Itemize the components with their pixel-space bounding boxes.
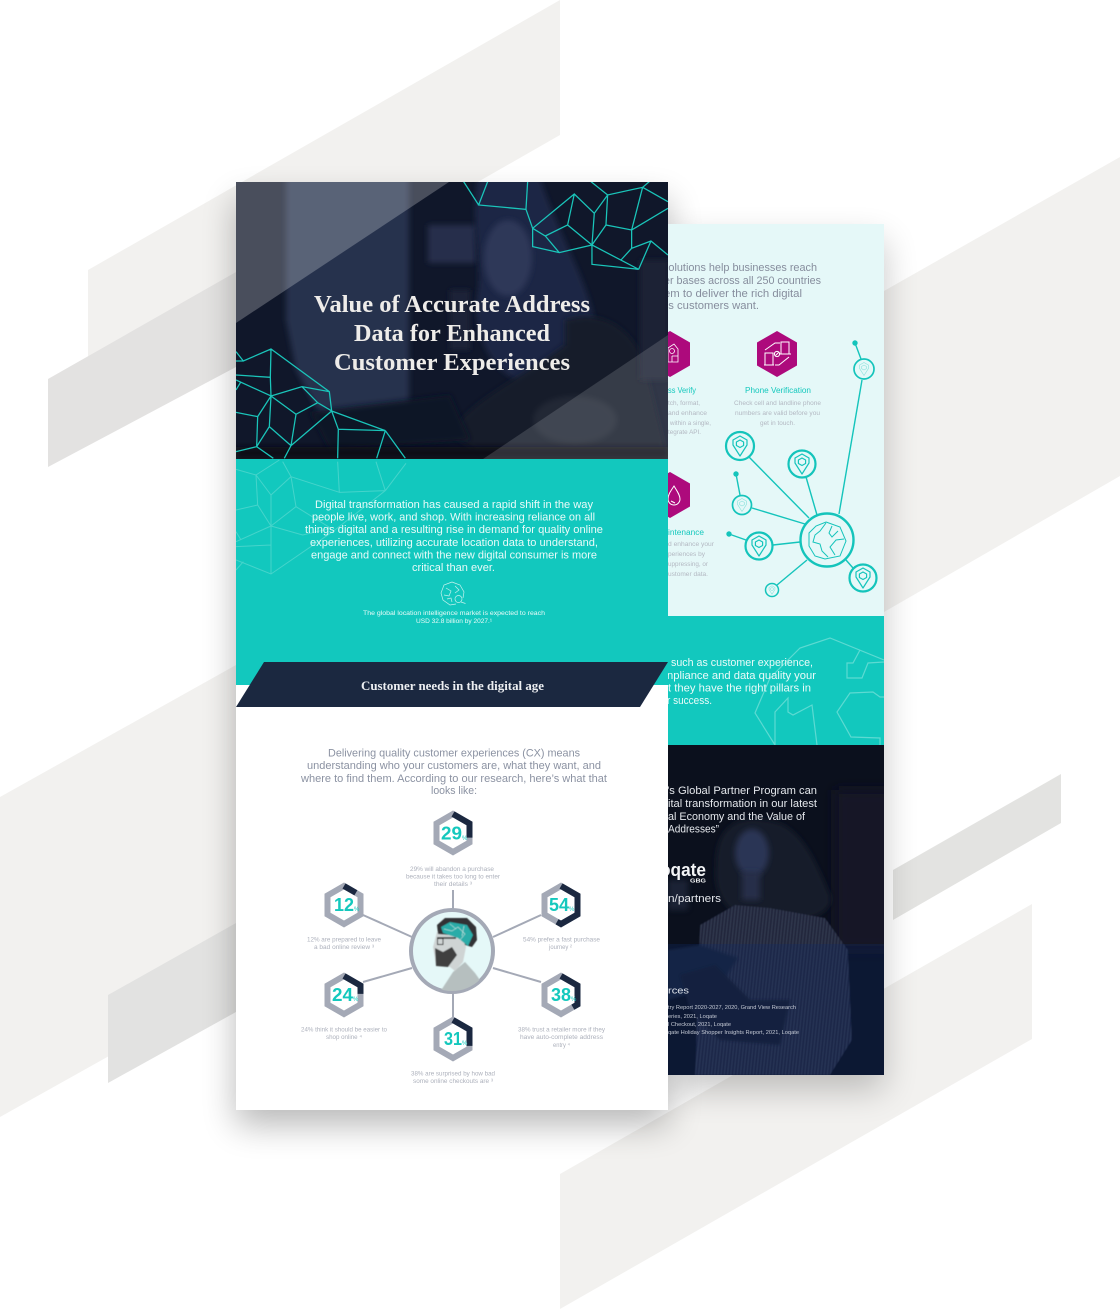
phone verification label: Check cell and landline phone	[734, 400, 822, 407]
stat: 24 percent	[301, 976, 387, 1041]
faint globe outline	[755, 638, 884, 745]
caption: 38% trust a retailer more if they	[518, 1026, 606, 1034]
phone verification label: get in touch.	[760, 420, 795, 427]
stat: 54 percent	[523, 886, 601, 951]
address verify label	[668, 386, 711, 436]
partners url: n/partners	[668, 893, 722, 905]
stat: 38 percent: %	[571, 997, 577, 1003]
panel: right dark partner section	[660, 745, 895, 1075]
caption	[301, 1026, 387, 1041]
solutions text: em to deliver the rich digital	[664, 288, 802, 300]
solutions text: er bases across all 250 countries	[664, 275, 821, 287]
caption: because it takes too long to enter	[406, 874, 500, 880]
maintenance label: ustomer data.	[668, 571, 708, 578]
maintenance label: uppressing, or	[668, 561, 708, 568]
market stat: USD 32.8 billion by 2027.¹	[416, 618, 492, 625]
banner: customer needs	[236, 662, 668, 707]
phone verification label: numbers are valid before you	[735, 410, 821, 417]
address verify label: and enhance	[668, 410, 708, 417]
phone verification label: Phone Verification	[745, 386, 811, 395]
caption: a bad online review ³	[314, 944, 374, 951]
panel: teal intro	[236, 459, 668, 685]
stat: 24 percent: %	[353, 997, 359, 1003]
partner program text: al Economy and the Value of	[668, 811, 806, 823]
stat: 12 percent: %	[354, 907, 360, 913]
phone verification label	[734, 386, 822, 427]
Loqate logo: GBG	[690, 878, 706, 884]
panel: solutions light section	[650, 224, 884, 616]
caption: their details ³	[434, 881, 472, 888]
panel: right teal section	[667, 616, 884, 745]
stat: 24 percent: 24	[332, 985, 353, 1005]
CX intro text: Delivering quality customer experiences (CX) means	[328, 748, 580, 760]
maintenance label: periences by	[668, 551, 706, 558]
caption	[411, 1070, 495, 1085]
market stat	[363, 610, 545, 625]
stat: 31 percent: %	[462, 1041, 468, 1047]
right teal text	[667, 657, 816, 707]
sources: try Report 2020-2027, 2020, Grand View Research	[668, 1005, 796, 1011]
address verify label: tch, format,	[668, 400, 700, 407]
panel: hero photo	[236, 170, 668, 459]
sources: eries, 2021, Loqate	[668, 1014, 717, 1020]
stat: 38 percent: 38	[551, 985, 571, 1005]
photo: woman with tablet	[668, 790, 895, 1075]
solutions text	[663, 262, 821, 312]
portrait: man with teal brain	[411, 910, 493, 995]
caption	[406, 866, 500, 888]
caption: 29% will abandon a purchase	[410, 866, 495, 873]
Loqate logo: oqate	[660, 860, 706, 880]
caption	[307, 936, 381, 951]
spokes connecting stats to portrait	[363, 890, 541, 1018]
sources: rces	[668, 986, 689, 996]
partner program text: ital transformation in our latest	[668, 798, 818, 810]
CX intro text: looks like:	[431, 785, 477, 797]
intro paragraph: critical than ever.	[412, 562, 495, 574]
intro paragraph: experiences, utilizing accurate location data to understand,	[310, 537, 598, 549]
sources: l Checkout, 2021, Loqate	[668, 1022, 731, 1028]
card shadows	[236, 200, 884, 1125]
stat: 29 percent: 29	[441, 824, 462, 844]
caption	[518, 1026, 606, 1049]
banner: customer needs: Customer needs in the digital age	[361, 679, 544, 693]
photo: woman at a laptop	[236, 170, 668, 459]
title: Value of Accurate Address	[314, 292, 590, 318]
intro paragraph	[305, 499, 603, 574]
caption: some online checkouts are ³	[413, 1078, 493, 1085]
caption: 24% think it should be easier to	[301, 1026, 387, 1034]
panel: right card back page	[668, 224, 884, 1075]
title: Customer Experiences	[334, 350, 570, 376]
market stat: The global location intelligence market is expected to reach	[363, 610, 545, 617]
caption: have auto-complete address	[520, 1034, 603, 1041]
maintenance label	[668, 528, 714, 578]
stat: 12 percent: 12	[334, 895, 354, 915]
title	[314, 292, 590, 376]
CX intro text: where to find them. According to our research, here’s what that	[300, 773, 608, 785]
address verify label: tegrate API.	[668, 429, 701, 436]
mesh: lower left network	[236, 349, 405, 458]
right teal text: r success.	[667, 695, 712, 707]
maintenance label: intenance	[668, 528, 705, 537]
faint mesh reflection	[236, 460, 406, 574]
address verify label: ss Verify	[668, 386, 696, 395]
right teal text: t they have the right pillars in	[668, 682, 811, 694]
panel: main front card	[236, 170, 668, 1110]
intro paragraph: engage and connect with the new digital consumer is more	[311, 550, 597, 562]
title: Data for Enhanced	[354, 321, 551, 347]
caption: 12% are prepared to leave	[307, 936, 381, 944]
icon: phone verification hexagon	[757, 331, 797, 377]
stat: 29 percent: %	[462, 836, 468, 842]
stat: 54 percent: %	[569, 907, 575, 913]
sources	[668, 986, 799, 1036]
CX intro text	[300, 748, 608, 797]
stat: 29 percent	[406, 814, 500, 888]
partner program text: ’s Global Partner Program can	[667, 785, 817, 797]
solutions text: solutions help businesses reach	[663, 262, 817, 274]
partner program text	[667, 785, 818, 836]
caption: 54% prefer a fast purchase	[523, 936, 601, 944]
light diagonal overlay top left	[236, 182, 449, 323]
intro paragraph: Digital transformation has caused a rapid shift in the way	[315, 499, 593, 511]
address verify label: within a single,	[669, 420, 711, 427]
caption: journey ²	[548, 944, 572, 951]
right teal text: npliance and data quality your	[667, 670, 816, 682]
sources: qate Holiday Shopper Insights Report, 2021, Loqate	[668, 1030, 799, 1036]
caption: shop online ⁴	[326, 1034, 362, 1041]
icon: maintenance hexagon	[650, 472, 690, 518]
intro paragraph: people live, work, and shop. With increasing reliance on all	[312, 512, 595, 524]
icon: globe with magnifier	[441, 582, 466, 605]
network diagram: globe and location pins	[726, 340, 876, 596]
intro paragraph: things digital and a resulting rise in demand for quality online	[305, 524, 603, 536]
stat: 38 percent	[518, 976, 606, 1049]
mesh: top right network	[464, 182, 668, 269]
stat: 31 percent: 31	[444, 1029, 462, 1049]
caption: 38% are surprised by how bad	[411, 1070, 495, 1078]
right teal text: such as customer experience,	[671, 657, 813, 669]
caption: entry ⁴	[553, 1042, 570, 1049]
maintenance label: d enhance your	[668, 541, 714, 548]
stat: 31 percent	[411, 1020, 495, 1085]
partner program text: Addresses”	[668, 824, 719, 836]
solutions text: ’s customers want.	[666, 300, 759, 312]
CX intro text: understanding who your customers are, what they want, and	[307, 760, 601, 772]
stat: 54 percent: 54	[549, 895, 569, 915]
stat: 12 percent	[307, 886, 381, 951]
caption	[523, 936, 601, 951]
icon: address verify hexagon	[650, 331, 690, 377]
light diagonal overlay bottom right	[483, 335, 668, 459]
